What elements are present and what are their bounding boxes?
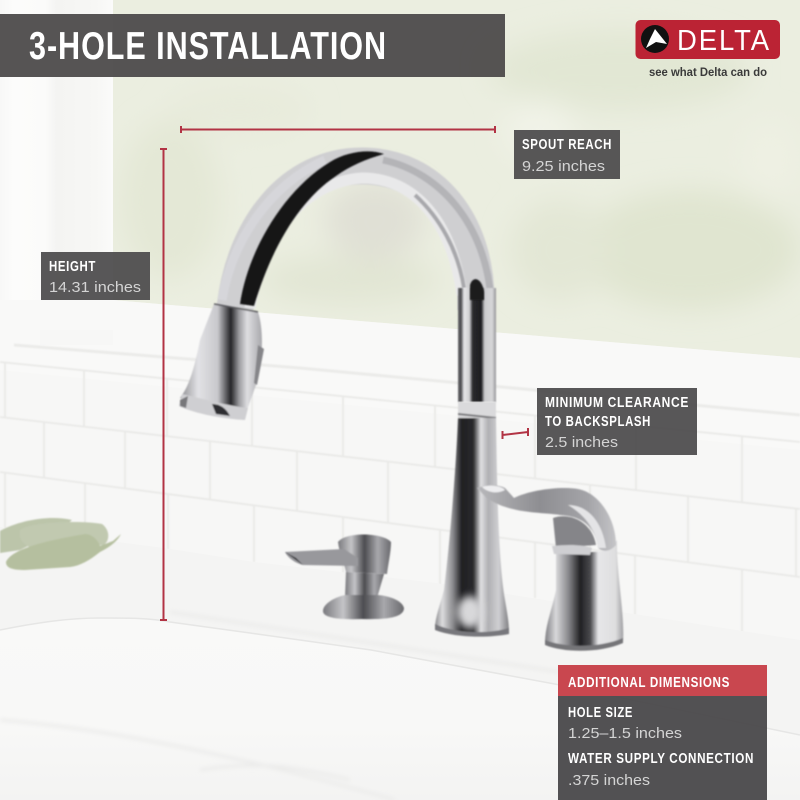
callout: spout reach — [514, 130, 620, 179]
panel header: ADDITIONAL DIMENSIONS — [568, 675, 730, 691]
green peppers on counter — [0, 518, 121, 570]
panel: additional dimensions — [558, 665, 767, 800]
marble veins — [0, 612, 560, 800]
logo badge — [636, 20, 780, 59]
hole size — [568, 705, 682, 742]
callout: minimum clearance: MINIMUM CLEARANCE — [545, 395, 689, 411]
hole size: HOLE SIZE — [568, 705, 633, 721]
callout: height: 14.31 inches — [49, 279, 141, 296]
callout: height: HEIGHT — [49, 259, 96, 275]
faucet base body — [435, 402, 509, 637]
logo badge: DELTA — [677, 25, 771, 57]
marble counter — [0, 527, 800, 800]
logo tagline: see what Delta can do — [649, 67, 767, 79]
water supply connection: WATER SUPPLY CONNECTION — [568, 751, 754, 767]
callout: minimum clearance: 2.5 inches — [545, 434, 618, 451]
soap dispenser — [285, 534, 404, 619]
window frame — [0, 0, 800, 450]
panel header — [558, 665, 767, 696]
sink basin — [0, 618, 800, 800]
sill shadow line — [14, 345, 800, 415]
subway tile lines — [0, 362, 800, 632]
callout: minimum clearance: TO BACKSPLASH — [545, 414, 651, 430]
spout arch — [222, 151, 496, 402]
callout: minimum clearance — [537, 388, 697, 455]
callout: spout reach: 9.25 inches — [522, 158, 605, 175]
pull-down spray head — [179, 304, 264, 420]
water supply connection — [568, 751, 754, 789]
counter front edge — [0, 618, 800, 735]
title banner — [0, 14, 505, 77]
faucet — [179, 151, 623, 651]
dimension arrow: backsplash clearance — [502, 428, 528, 439]
panel body — [558, 696, 767, 800]
callout: height — [41, 252, 150, 300]
lever handle and valve — [477, 485, 623, 651]
window view with greenery — [113, 0, 800, 358]
callout: spout reach: SPOUT REACH — [522, 137, 612, 153]
hole size: 1.25–1.5 inches — [568, 725, 682, 742]
Delta logo — [636, 20, 780, 79]
dimension arrow: height — [160, 149, 167, 620]
title banner: 3-HOLE INSTALLATION — [29, 25, 387, 68]
water supply connection: .375 inches — [568, 772, 650, 789]
dimension arrow: spout reach — [181, 126, 495, 133]
